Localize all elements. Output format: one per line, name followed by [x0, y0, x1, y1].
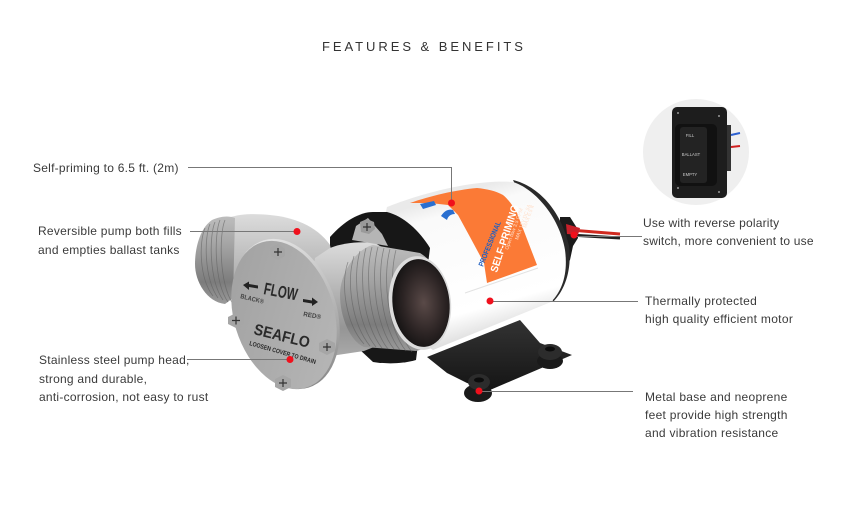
- text: thermally protected motor: [645, 294, 793, 326]
- text: stainless steel: Stainless steel pump head,: [39, 353, 190, 367]
- orange label: [410, 188, 538, 293]
- text: thermally protected motor: high quality efficient motor: [645, 312, 793, 326]
- cover bolts: [228, 244, 335, 391]
- bolt behind: [352, 218, 388, 246]
- text: metal base: and vibration resistance: [645, 426, 778, 440]
- orange label: PROFESSIONAL: [477, 220, 503, 268]
- front housing: [304, 242, 389, 357]
- text: reverse polarity switch: [643, 216, 814, 248]
- cover text: BLACK®: [240, 292, 265, 306]
- callout leader lines: [187, 168, 642, 392]
- text: reverse polarity switch: Use with reverse polarity: [643, 216, 779, 230]
- text: self-priming: Self-priming to 6.5 ft. (2m): [33, 161, 179, 175]
- text: stainless steel: [39, 353, 208, 404]
- cover text: LOOSEN COVER TO DRAIN: [248, 340, 317, 366]
- motor body: [373, 182, 566, 350]
- icon: switch inset: FILL: [686, 133, 695, 138]
- callout dots: [286, 200, 578, 394]
- icon: switch inset: [643, 99, 749, 205]
- pump head cover: [214, 225, 357, 403]
- wires and terminal: [560, 217, 620, 272]
- orange label: MAX 12V DC 5A: [514, 203, 533, 241]
- text: metal base: feet provide high strength: [645, 408, 788, 422]
- cover text: SEAFLO: [252, 321, 311, 352]
- label texts: SELF-PRIMING: [488, 204, 521, 274]
- text: stainless steel: strong and durable,: [39, 372, 147, 386]
- cover text: [240, 279, 322, 366]
- text: reverse polarity switch: switch, more convenient to use: [643, 234, 814, 248]
- motor rear cap: [513, 180, 570, 302]
- text: metal base: Metal base and neoprene: [645, 390, 788, 404]
- rear pipe and pump housing: [195, 214, 340, 345]
- text: reversible pump: Reversible pump both fills: [38, 224, 182, 238]
- front threaded pipe: [340, 245, 456, 353]
- text: reversible pump: [38, 224, 182, 257]
- cover text: RED®: [303, 310, 322, 321]
- text: stainless steel: anti-corrosion, not easy to rust: [39, 390, 208, 404]
- text: reversible pump: and empties ballast tanks: [38, 243, 180, 257]
- text: thermally protected motor: Thermally protected: [645, 294, 757, 308]
- title: FEATURES & BENEFITS: [322, 39, 526, 54]
- text: metal base: [645, 390, 788, 440]
- orange label: Open flow 3.5 GPM: [504, 208, 525, 251]
- orange label: MAX 6.5 ft: [522, 204, 536, 229]
- icon: switch inset: EMPTY: [683, 172, 697, 177]
- flange ring: [330, 212, 430, 363]
- icon: switch inset: BALLAST: [682, 152, 701, 157]
- mounting base: [427, 320, 572, 402]
- cover text: FLOW: [262, 279, 300, 305]
- pump: [195, 180, 620, 403]
